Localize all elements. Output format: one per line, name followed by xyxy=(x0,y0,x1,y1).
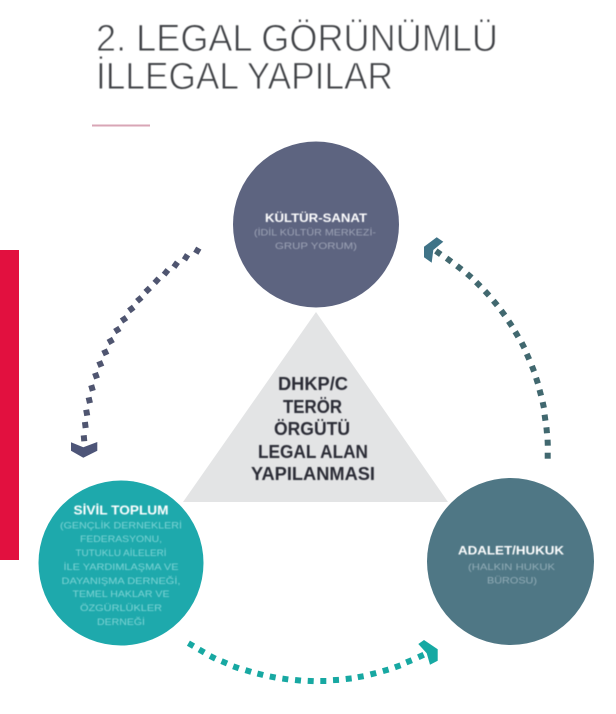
sivil toplum text: TUTUKLU AİLELERİ xyxy=(76,548,166,559)
center text: DHKP/C xyxy=(278,374,348,394)
title: İLLEGAL YAPILAR xyxy=(96,55,393,98)
title: 2. LEGAL GÖRÜNÜMLÜ xyxy=(96,18,498,60)
sivil toplum text: DAYANIŞMA DERNEĞİ, xyxy=(62,576,180,587)
adalet/hukuk text xyxy=(458,544,564,586)
center text xyxy=(251,374,375,484)
sivil toplum text xyxy=(60,502,182,628)
sivil toplum text: (GENÇLİK DERNEKLERİ xyxy=(60,520,182,532)
kültür-sanat text xyxy=(254,210,376,252)
sivil toplum text: ÖZGÜRLÜKLER xyxy=(80,603,162,614)
arrow: adalet/hukuk to kültür-sanat xyxy=(424,237,551,459)
sivil toplum text: İLE YARDIMLAŞMA VE xyxy=(64,562,178,573)
kültür-sanat text: (İDİL KÜLTÜR MERKEZİ- xyxy=(254,228,376,238)
adalet/hukuk text: BÜROSU) xyxy=(487,576,537,586)
sivil toplum text: TEMEL HAKLAR VE xyxy=(72,589,170,600)
center text: LEGAL ALAN xyxy=(258,442,368,462)
sivil toplum text: DERNEĞİ xyxy=(97,617,145,628)
red side bar xyxy=(0,250,19,560)
center triangle xyxy=(183,312,448,502)
center text: ÖRGÜTÜ xyxy=(274,419,350,439)
arrow: kültür-sanat to sivil toplum xyxy=(71,247,201,458)
panel: adalet/hukuk xyxy=(427,478,594,645)
center text: YAPILANMASI xyxy=(251,464,375,484)
adalet/hukuk text: ADALET/HUKUK xyxy=(458,544,564,558)
sivil toplum text: SİVİL TOPLUM xyxy=(74,502,168,518)
kültür-sanat text: GRUP YORUM) xyxy=(275,241,357,252)
center text: TERÖR xyxy=(283,397,342,417)
arrow: sivil toplum to adalet/hukuk xyxy=(187,640,438,684)
sivil toplum text: FEDERASYONU, xyxy=(80,534,162,545)
panel: sivil toplum xyxy=(38,480,204,646)
title underline xyxy=(92,124,150,126)
panel: kültür-sanat xyxy=(233,142,399,308)
kültür-sanat text: KÜLTÜR-SANAT xyxy=(265,210,368,225)
title xyxy=(96,18,498,98)
adalet/hukuk text: (HALKIN HUKUK xyxy=(468,562,556,573)
